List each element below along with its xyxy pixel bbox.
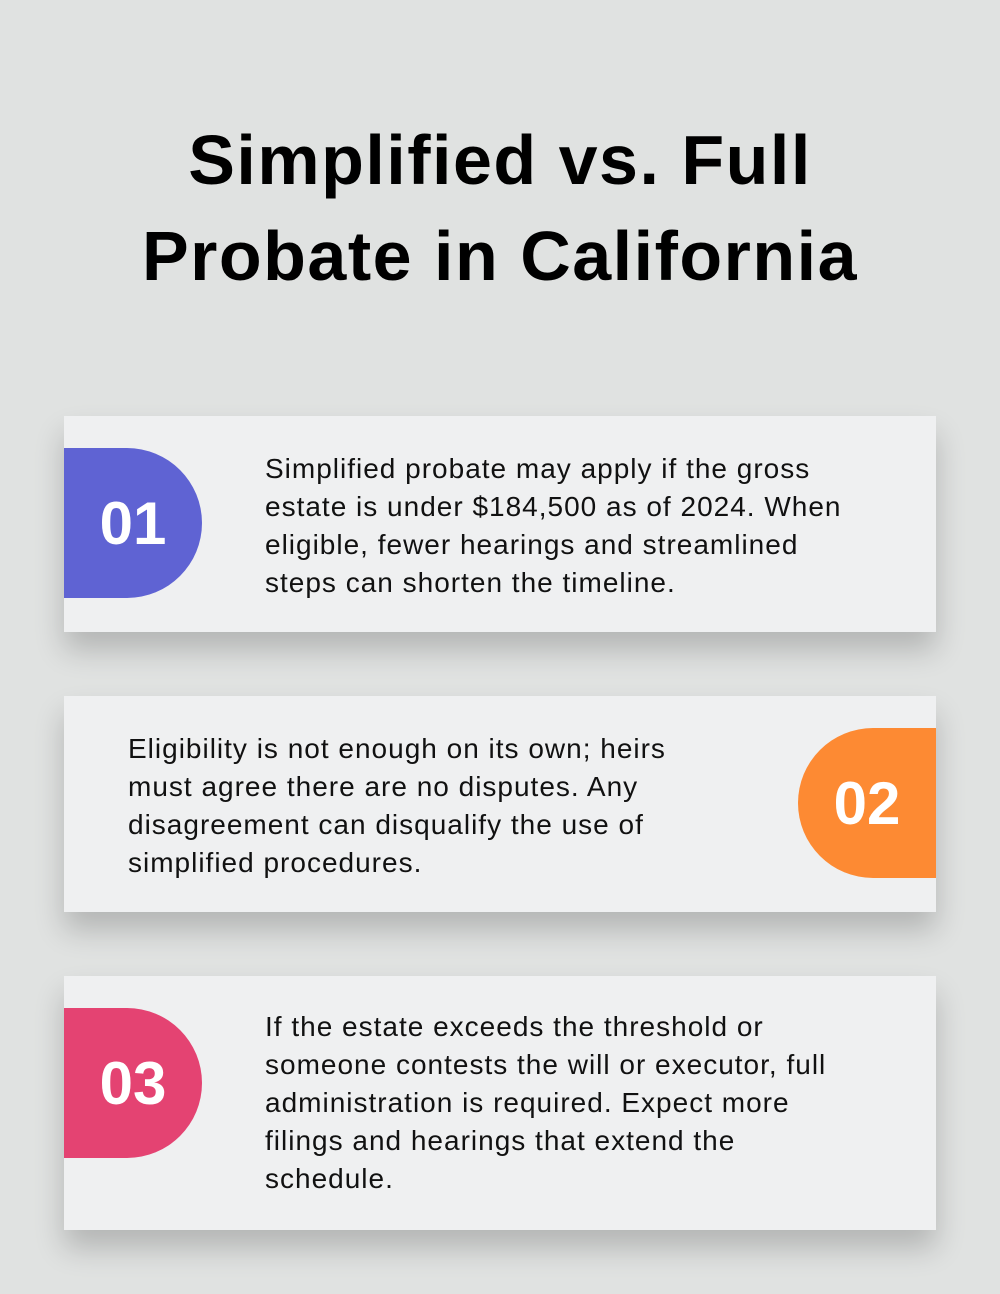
text 2 <box>128 733 666 878</box>
panel: card 3 <box>64 976 936 1230</box>
badge 01 <box>64 448 202 598</box>
text 3 <box>265 1011 826 1194</box>
title <box>142 121 858 295</box>
badge 03 <box>64 1008 202 1158</box>
badge 02 <box>798 728 936 878</box>
text 3: filings and hearings that extend the <box>265 1125 735 1156</box>
text 2: must agree there are no disputes. Any <box>128 771 638 802</box>
badge 02: 02 <box>834 770 900 836</box>
text 1: estate is under $184,500 as of 2024. When <box>265 491 842 522</box>
badge 01: 01 <box>100 490 166 556</box>
text 1: Simplified probate may apply if the gross <box>265 453 810 484</box>
text 1: eligible, fewer hearings and streamlined <box>265 529 798 560</box>
panel: card 2 <box>64 696 936 912</box>
panel: card 1 <box>64 416 936 632</box>
text 2: Eligibility is not enough on its own; heirs <box>128 733 666 764</box>
text 3: schedule. <box>265 1163 394 1194</box>
title: Probate in California <box>142 217 858 295</box>
text 3: If the estate exceeds the threshold or <box>265 1011 764 1042</box>
text 1 <box>265 453 842 598</box>
badge 03: 03 <box>100 1050 166 1116</box>
text 3: administration is required. Expect more <box>265 1087 790 1118</box>
text 2: simplified procedures. <box>128 847 422 878</box>
text 2: disagreement can disqualify the use of <box>128 809 644 840</box>
text 3: someone contests the will or executor, full <box>265 1049 826 1080</box>
title: Simplified vs. Full <box>188 121 812 199</box>
text 1: steps can shorten the timeline. <box>265 567 676 598</box>
